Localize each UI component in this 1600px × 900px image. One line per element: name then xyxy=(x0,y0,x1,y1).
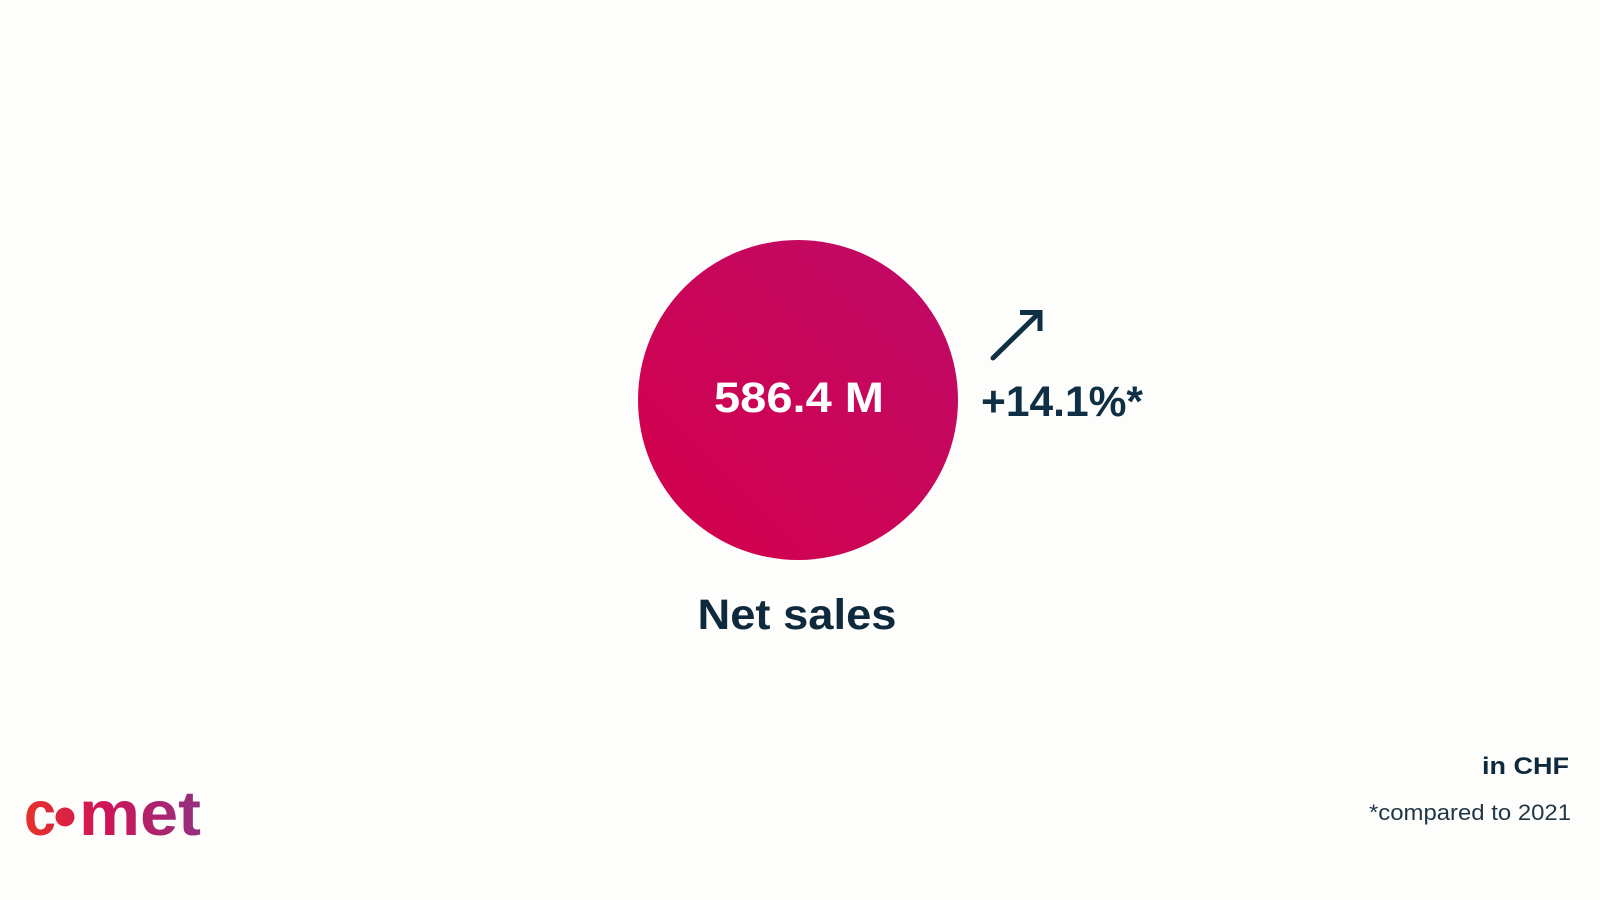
logo: comet: met xyxy=(79,779,201,849)
icon: up arrow xyxy=(993,312,1040,358)
footnote: *compared to 2021 xyxy=(1369,800,1571,825)
growth percentage: +14.1%* xyxy=(981,378,1143,426)
unit note: in CHF xyxy=(1482,753,1569,780)
heading: net sales: Net sales xyxy=(698,591,896,639)
logo: comet: c xyxy=(24,779,56,849)
circle value: 586.4 M xyxy=(714,374,884,422)
net sales circle xyxy=(638,240,958,560)
logo: comet xyxy=(24,779,201,849)
